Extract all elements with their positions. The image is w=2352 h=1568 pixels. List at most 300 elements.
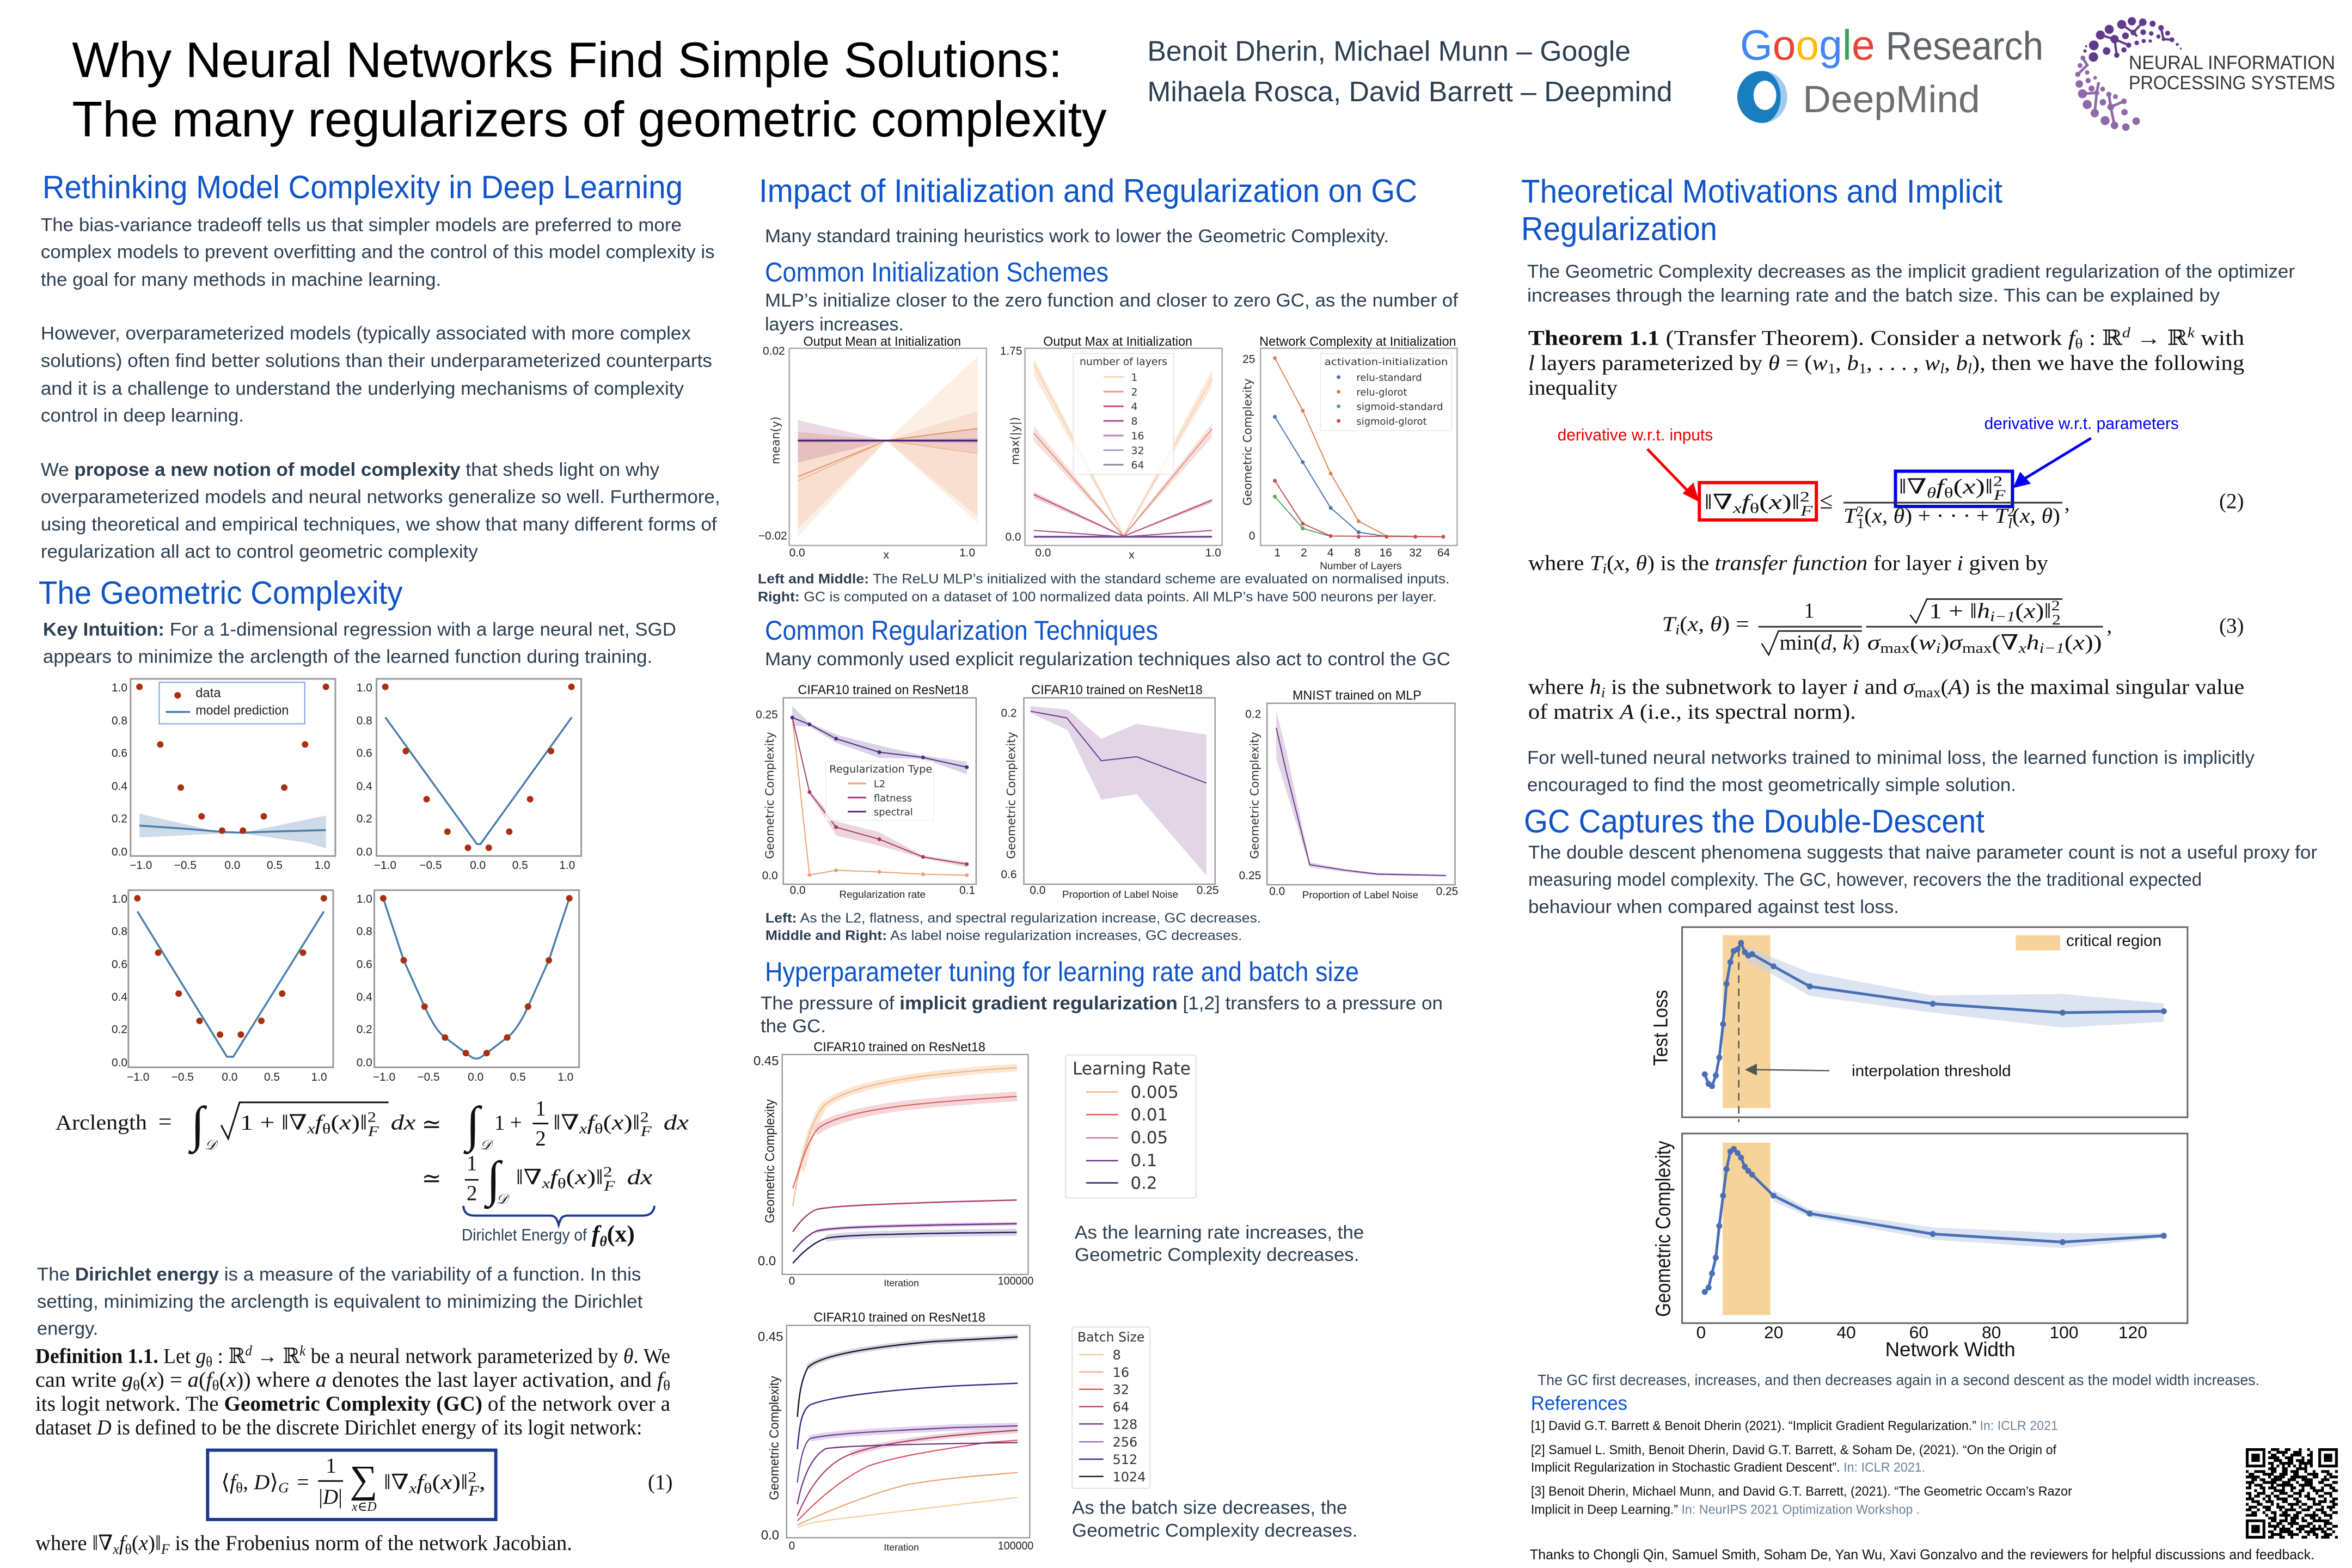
chart: batch size vs GC: 0.0: [761, 1528, 779, 1542]
chart: regression fit, early training: 0.2: [112, 813, 127, 825]
chart: batch size vs GC: 0: [789, 1540, 795, 1552]
text block: subnetwork definition: [1528, 675, 2244, 724]
chart: label noise CIFAR10: [1001, 683, 1219, 901]
text block: learning rate conclusion: [1075, 1222, 1364, 1265]
chart: regression fit, sharper V: 0.0: [112, 1056, 127, 1069]
heading: theoretical motivations: Theoretical Motivations and Implicit: [1521, 173, 2002, 210]
text block: theorem 1.1: ), then we have the following: [1972, 351, 2244, 375]
text block: new notion of model complexity: [41, 460, 720, 562]
equation: arclength: ∫: [188, 1096, 207, 1154]
chart: network complexity at initialization: 25: [1242, 353, 1255, 366]
text block: training heuristics: Many standard training heuristics work to lower the Geometric Complexity.: [765, 226, 1389, 247]
equation: transfer function: min(d, k): [1780, 631, 1860, 654]
chart: regression fit, sharper V: 0.0: [222, 1071, 237, 1083]
equation: arclength: x: [307, 1120, 315, 1136]
chart: regularization type vs GC: Regularization Type: [829, 763, 932, 775]
chart: regularization type vs GC: Geometric Complexity: [763, 732, 776, 859]
chart: regularization type vs GC: L2: [874, 779, 885, 790]
chart: regularization type vs GC: 0.0: [762, 869, 778, 882]
equation: transfer function: x: [2018, 640, 2026, 656]
chart: regression fit, early training: 1.0: [112, 682, 127, 694]
chart: regularization type vs GC: CIFAR10 trained on ResNet18: [798, 683, 969, 697]
chart: label noise CIFAR10: 0.25: [1197, 884, 1219, 897]
text block: definition 1.1: θ: [663, 1377, 670, 1393]
text block: frobenius norm: x: [112, 1541, 119, 1557]
text block: theorem 1.1: : ℝ: [2083, 327, 2123, 350]
text block: definition 1.1: θ: [212, 1377, 219, 1393]
chart: network complexity at initialization: Network Complexity at Initialization: [1259, 334, 1456, 349]
equation box: geometric complexity definition: θ: [424, 1480, 432, 1496]
chart: regression fit, sharper V: 1.0: [112, 893, 127, 905]
chart: label noise CIFAR10: CIFAR10 trained on ResNet18: [1031, 683, 1203, 697]
equation: transfer inequality: f: [1936, 475, 1948, 498]
equation: arclength: ≃: [421, 1112, 442, 1138]
text block: theorem 1.1: with: [2195, 327, 2244, 350]
equation: transfer inequality: x: [1732, 500, 1742, 516]
text block: MLP initialization: MLP’s initialize closer to the zero function and closer to zero GC, as the number of: [765, 290, 1458, 311]
chart: label noise MNIST: Geometric Complexity: [1248, 732, 1261, 859]
chart: output mean at initialization: 1.0: [959, 547, 975, 559]
chart: geometric complexity vs network width: Network Width: [1885, 1338, 2016, 1361]
text block: definition 1.1: : ℝ: [212, 1344, 246, 1368]
text block: definition 1.1: Definition 1.1. Let g: [35, 1344, 206, 1368]
text block: theorem 1.1: → ℝ: [2130, 327, 2188, 350]
legend: batch size: Batch Size: [1077, 1330, 1144, 1345]
chart: regression fit, early training: 0.6: [112, 747, 127, 759]
equation: transfer inequality: θ: [1750, 500, 1759, 516]
equation: transfer inequality: (: [1864, 504, 1872, 528]
legend: batch size: 8: [1113, 1347, 1121, 1363]
text block: dirichlet energy: The Dirichlet energy is a measure of the variability of a function. In this: [37, 1264, 641, 1285]
chart: regularization type vs GC: flatness: [874, 793, 912, 804]
chart: output mean at initialization: −0.02: [758, 530, 787, 542]
chart: regression fit, sharper V: 0.4: [112, 991, 127, 1003]
chart: regression fit, sharper V: −0.5: [171, 1071, 194, 1083]
text block: definition 1.1: k: [299, 1343, 306, 1358]
equation: transfer function: σ: [1949, 631, 1963, 654]
equation number 2: (2): [2219, 489, 2244, 513]
chart: regression fit, V shape: 0.5: [512, 859, 528, 872]
logo: DeepMind: [1737, 71, 1980, 123]
legend: learning rate: 0.2: [1131, 1174, 1157, 1193]
chart: regression fit, early training: −1.0: [130, 859, 152, 872]
text block: overparameterized models: [41, 323, 712, 426]
text block: theorem 1.1: , . . . ,: [1866, 351, 1925, 375]
chart: output max at initialization: max(|y|): [1009, 417, 1022, 465]
chart: output max at initialization: x: [1129, 549, 1135, 561]
equation: transfer inequality: 2: [1800, 489, 1810, 505]
heading: the geometric complexity: The Geometric Complexity: [39, 574, 403, 611]
chart: regression fit, early training: 0.4: [112, 780, 127, 793]
chart: regularization type vs GC: 0.25: [756, 709, 778, 721]
equation: arclength: x)‖: [340, 1111, 364, 1135]
text block: theorem 1.1: 1: [1859, 360, 1866, 376]
logo: DeepMind: DeepMind: [1803, 78, 1980, 120]
text block: definition 1.1: → ℝ: [252, 1344, 300, 1368]
text block: bias-variance tradeoff: complex models to prevent overfitting and the control of this model complexity is: [41, 242, 715, 262]
logo: Google Research: [1740, 22, 2043, 69]
chart: learning rate vs GC: 0.45: [754, 1054, 779, 1069]
text block: MLP initialization: [765, 290, 1458, 335]
text block: new notion of model complexity: regularization all act to control geometric complexity: [41, 541, 479, 562]
references: [1531, 1393, 2072, 1517]
text block: double descent: [1528, 842, 2317, 917]
annotation: derivative w.r.t. parameters: [1984, 414, 2179, 488]
chart: learning rate vs GC: 100000: [998, 1275, 1033, 1288]
caption: double descent: The GC first decreases, increases, and then decreases again in a second descent as the model width increases.: [1538, 1371, 2259, 1388]
equation: arclength: θ: [595, 1120, 603, 1136]
equation box: geometric complexity definition: |D|: [318, 1485, 342, 1509]
chart: geometric complexity vs network width: 80: [1982, 1322, 2001, 1342]
text block: MLP initialization: layers increases.: [765, 314, 904, 335]
text block: subnetwork definition: is the subnetwork to layer: [1606, 675, 1853, 699]
text block: theorem 1.1: k: [2188, 325, 2195, 341]
equation: arclength: ∫: [463, 1096, 482, 1154]
chart: batch size vs GC: 0.45: [758, 1330, 783, 1344]
equation box: geometric complexity definition: [207, 1450, 496, 1520]
text block: subnetwork definition: where h: [1528, 675, 1600, 699]
equation: arclength: 2: [603, 1164, 612, 1180]
chart: regression fit, sharper V: 0.5: [264, 1071, 280, 1083]
equation: transfer inequality: x)‖: [1963, 475, 1988, 498]
equation: transfer function: 2: [2052, 612, 2061, 628]
equation: transfer inequality: ‖∇: [1898, 475, 1919, 498]
equation: arclength: (: [566, 1166, 575, 1189]
references: References: [1531, 1393, 1627, 1414]
chart: regression fit, converged: 0.8: [357, 926, 372, 938]
equation box: geometric complexity definition: f: [416, 1471, 427, 1494]
panel: double descent: [1524, 803, 2338, 1563]
text block: overparameterized models: However, overparameterized models (typically associated with more complex: [41, 323, 691, 344]
text block: learning rate conclusion: Geometric Complexity decreases.: [1075, 1245, 1359, 1265]
equation: transfer function: x)‖: [2024, 599, 2048, 623]
annotation: derivative w.r.t. parameters: derivative w.r.t. parameters: [1984, 414, 2179, 433]
chart: label noise MNIST: [1239, 688, 1458, 901]
text block: definition 1.1: θ: [206, 1353, 212, 1369]
chart: output mean at initialization: x: [884, 549, 890, 561]
text block: theorem 1.1: inequality: [1528, 376, 1618, 400]
chart: geometric complexity vs network width: 60: [1909, 1322, 1928, 1342]
chart: regression fit, V shape: 0.2: [357, 813, 372, 825]
equation box: geometric complexity definition: =: [297, 1471, 309, 1494]
chart: regression fit, converged: [357, 890, 579, 1083]
chart: regression fit, V shape: 1.0: [559, 859, 575, 872]
equation: transfer inequality: F: [1800, 503, 1814, 519]
equation: transfer inequality: θ: [1927, 485, 1937, 500]
equation: transfer function: i: [1675, 622, 1680, 638]
text block: frobenius norm: f: [119, 1532, 128, 1555]
equation box: geometric complexity definition: θ: [236, 1480, 243, 1496]
chart: regression fit, early training: 0.0: [112, 846, 127, 858]
chart: learning rate vs GC: [754, 1040, 1033, 1289]
chart: learning rate vs GC: 0.0: [758, 1254, 776, 1269]
annotation: derivative w.r.t. inputs: [1558, 425, 1713, 502]
text block: subnetwork definition: (: [1941, 675, 1949, 699]
equation: transfer function: (∇: [1992, 631, 2019, 654]
text block: theorem 1.1: l: [1968, 360, 1972, 376]
legend: critical region: critical region: [2066, 932, 2161, 950]
chart: test loss vs network width: [1650, 927, 2188, 1122]
equation: transfer function: 1 + ‖ h: [1929, 599, 1988, 623]
equation: transfer inequality: f: [1742, 491, 1754, 514]
chart: output mean at initialization: mean(y): [769, 416, 782, 464]
legend: learning rate: 0.01: [1131, 1105, 1168, 1125]
equation: arclength: ≃: [421, 1166, 442, 1192]
equation: transfer inequality: 2: [2007, 504, 2015, 519]
chart: label noise CIFAR10: Proportion of Label Noise: [1062, 889, 1178, 901]
equation: transfer inequality: (: [2012, 504, 2020, 528]
chart: network complexity at initialization: 32: [1409, 547, 1422, 559]
legend: learning rate: [1065, 1055, 1196, 1198]
equation: arclength: (: [330, 1111, 340, 1135]
equation: arclength: x: [579, 1120, 587, 1136]
chart: network complexity at initialization: 64: [1437, 547, 1450, 559]
equation: arclength: [56, 1096, 689, 1209]
chart: network complexity at initialization: sigmoid-glorot: [1356, 416, 1427, 427]
text block: frobenius norm: F: [161, 1541, 170, 1557]
QR code: [2246, 1448, 2338, 1539]
chart: output max at initialization: number of layers: [1080, 356, 1167, 368]
caption: regularization charts: Left: As the L2, flatness, and spectral regularization increase, GC decreases.: [765, 911, 1261, 926]
text block: definition 1.1: x)) where a denotes the last layer activation, and f: [226, 1368, 663, 1392]
chart: learning rate vs GC: Iteration: [884, 1278, 919, 1289]
chart: regularization type vs GC: spectral: [874, 807, 913, 818]
equation: transfer function: (: [2015, 599, 2024, 623]
text block: implicit gradient regularization: The pressure of implicit gradient regularization [1,2] transfers to a pressure on: [761, 993, 1443, 1014]
text block: transfer function: where T: [1528, 552, 1602, 575]
chart: output max at initialization: 0.0: [1035, 547, 1051, 559]
equation: transfer inequality: (: [1953, 475, 1963, 498]
chart: label noise MNIST: 0.0: [1269, 885, 1285, 898]
equation number 1: (1): [648, 1471, 672, 1494]
chart: geometric complexity vs network width: 40: [1836, 1322, 1856, 1342]
equation: arclength: dx: [384, 1111, 415, 1135]
heading: GC captures the double-descent: GC Captures the Double-Descent: [1524, 803, 1984, 840]
chart: output mean at initialization: 0.0: [789, 547, 805, 559]
equation box: geometric complexity definition: G: [278, 1480, 289, 1496]
chart: regression fit, converged: 0.0: [357, 1056, 372, 1069]
chart: output max at initialization: 0.0: [1005, 531, 1021, 543]
text block: theorem 1.1: [1528, 325, 2244, 400]
chart: regression fit, early training: −0.5: [174, 859, 197, 872]
annotation: dirichlet energy brace: Dirichlet Energy of: [462, 1226, 587, 1245]
equation: transfer inequality: l: [2008, 516, 2012, 531]
equation: transfer function: i−1: [2039, 640, 2065, 656]
chart: network complexity at initialization: relu-glorot: [1356, 387, 1407, 398]
text block: subnetwork definition: A) is the maximal singular value: [1949, 675, 2224, 699]
equation: arclength: Arclength: [56, 1111, 147, 1135]
references: [3] Benoit Dherin, Michael Munn, and David G.T. Barrett, (2021). “The Geometric Occam’s Razor: [1531, 1484, 2072, 1499]
equation: transfer function: T: [1662, 612, 1677, 636]
chart: output max at initialization: 2: [1131, 386, 1138, 398]
equation box: geometric complexity definition: ,: [479, 1471, 486, 1494]
text block: GC and optimizer: increases through the learning rate and the batch size. This can be explained by: [1527, 285, 2220, 306]
legend: batch size: 512: [1113, 1452, 1137, 1467]
text block: new notion of model complexity: using theoretical and empirical techniques, we show that many different forms of: [41, 514, 717, 535]
chart: regression fit, sharper V: 0.8: [112, 926, 127, 938]
chart: label noise CIFAR10: Geometric Complexity: [1005, 732, 1018, 859]
heading: impact of initialization and regularization: Impact of Initialization and Regularization on GC: [759, 173, 1417, 209]
chart: regression fit, V shape: 0.4: [357, 780, 372, 793]
text block: definition 1.1: d: [245, 1343, 252, 1358]
chart: regularization type vs GC: 0.0: [790, 884, 806, 897]
title: [72, 32, 1107, 148]
equation: transfer inequality: (: [1759, 491, 1769, 514]
chart: output max at initialization: 64: [1131, 460, 1144, 471]
text block: key intuition: appears to minimize the arclength of the learned function during training.: [43, 646, 652, 667]
chart: regression fit, sharper V: 0.2: [112, 1024, 127, 1036]
chart: output max at initialization: 1.0: [1205, 547, 1221, 559]
references: Implicit Regularization in Stochastic Gradient Descent”. In: ICLR 2021.: [1531, 1460, 1925, 1475]
heading: rethinking model complexity: Rethinking Model Complexity in Deep Learning: [42, 169, 683, 205]
chart: network complexity at initialization: 16: [1380, 547, 1392, 559]
legend: batch size: 64: [1113, 1400, 1129, 1415]
authors: Benoit Dherin, Michael Munn – Google: [1147, 35, 1631, 66]
equation: transfer function: σ: [1867, 631, 1882, 654]
text block: subnetwork definition: of matrix A (i.e., its spectral norm).: [1528, 700, 1856, 724]
chart: regression fit, converged: −1.0: [373, 1071, 395, 1083]
acknowledgements: Thanks to Chongli Qin, Samuel Smith, Soham De, Yan Wu, Xavi Gonzalvo and the reviewers for helpful discussions and feedback.: [1530, 1546, 2314, 1563]
equation: transfer function: i−1: [1990, 609, 2015, 624]
text block: well-tuned networks: encouraged to find the most geometrically simple solution.: [1527, 775, 2016, 795]
chart: batch size vs GC: Iteration: [884, 1542, 919, 1553]
equation: transfer inequality: [1699, 471, 2070, 531]
equation: arclength: x: [541, 1175, 550, 1191]
chart: geometric complexity vs network width: 0: [1696, 1322, 1706, 1342]
chart: network complexity at initialization: activation-initialization: [1325, 357, 1448, 368]
equation: transfer inequality: 2: [1993, 473, 2002, 489]
heading: theoretical motivations: [1521, 173, 2002, 247]
text block: key intuition: Key Intuition: For a 1-dimensional regression with a large neural net, SGD: [43, 620, 676, 640]
text block: theorem 1.1: l layers parameterized by θ = (w: [1528, 351, 1826, 375]
panel: impact of initialization and regularization: [754, 173, 1458, 1553]
equation: arclength: F: [603, 1178, 616, 1194]
chart: learning rate vs GC: CIFAR10 trained on ResNet18: [813, 1040, 985, 1055]
equation: arclength: 𝒟: [480, 1137, 494, 1153]
authors: [1147, 35, 1673, 107]
text block: theorem 1.1: b: [1956, 351, 1968, 375]
chart: regression fit, sharper V: 0.6: [112, 958, 127, 971]
text block: new notion of model complexity: overparameterized models and neural networks generalize so well. Furthermore,: [41, 487, 720, 507]
chart: batch size vs GC: [758, 1310, 1033, 1553]
equation: transfer inequality: x)‖: [1769, 491, 1795, 514]
chart: regression fit, early training: model prediction: [195, 703, 289, 718]
chart: regression fit, early training: [112, 679, 335, 872]
panel: the geometric complexity: [35, 574, 689, 1557]
chart: regression fit, converged: 1.0: [558, 1071, 573, 1083]
chart: regression fit, early training: 0.5: [267, 859, 283, 872]
equation: transfer function: 1: [1804, 599, 1815, 622]
equation: arclength: 2: [535, 1126, 546, 1150]
equation: transfer function: x, θ) =: [1688, 612, 1746, 636]
chart: batch size vs GC: CIFAR10 trained on ResNet18: [813, 1310, 985, 1325]
chart: batch size vs GC: 100000: [998, 1540, 1033, 1552]
equation: transfer function: (: [1680, 612, 1688, 636]
equation box: geometric complexity definition: x)‖: [440, 1471, 465, 1494]
equation: arclength: ‖∇: [516, 1166, 536, 1189]
logo: NeurIPS: PROCESSING SYSTEMS: [2129, 72, 2335, 94]
caption: regularization charts: [765, 911, 1261, 944]
text block: key intuition: [43, 620, 676, 667]
equation: arclength: 1 +: [494, 1111, 522, 1135]
annotation: dirichlet energy brace: (x): [607, 1221, 635, 1247]
text block: implicit gradient regularization: the GC.: [761, 1016, 826, 1037]
text block: new notion of model complexity: We propose a new notion of model complexity that sheds light on why: [41, 460, 660, 480]
text block: subnetwork definition: i and σ: [1853, 675, 1914, 699]
chart: label noise MNIST: 0.25: [1239, 869, 1261, 882]
equation box: geometric complexity definition: ∑: [350, 1458, 377, 1501]
text block: definition 1.1: θ. We: [623, 1344, 671, 1368]
legend: batch size: 128: [1113, 1417, 1137, 1432]
heading: theoretical motivations: Regularization: [1521, 211, 1717, 247]
equation: transfer function: max: [1880, 640, 1910, 656]
text block: transfer function: i: [1602, 561, 1607, 577]
equation: transfer inequality: ,: [2065, 492, 2070, 515]
logo: Google Research: Google: [1740, 22, 1875, 69]
text block: definition 1.1: can write g: [35, 1368, 132, 1392]
equation box: geometric complexity definition: 1: [326, 1454, 336, 1477]
references: [1] David G.T. Barrett & Benoit Dherin (2021). “Implicit Gradient Regularization.” In: ICLR 2021: [1531, 1418, 2058, 1433]
chart: regression fit, sharper V: −1.0: [127, 1071, 149, 1083]
equation: arclength: dx: [657, 1111, 689, 1135]
equation: transfer inequality: ‖∇: [1704, 491, 1725, 514]
text block: theorem 1.1: b: [1847, 351, 1859, 375]
equation: arclength: f: [550, 1166, 561, 1189]
text block: double descent: behaviour when compared against test loss.: [1528, 897, 1899, 917]
legend: batch size: 256: [1113, 1435, 1137, 1450]
equation: transfer inequality: F: [1993, 487, 2006, 503]
chart: regression fit, V shape: 0.0: [357, 846, 372, 858]
chart: regression fit, V shape: 1.0: [357, 682, 372, 694]
subheading: hyperparameter tuning: Hyperparameter tuning for learning rate and batch size: [765, 957, 1359, 987]
annotation: derivative w.r.t. inputs: derivative w.r.t. inputs: [1558, 425, 1713, 444]
equation: transfer function: i: [1936, 640, 1940, 656]
chart: network complexity at initialization: relu-standard: [1356, 372, 1422, 383]
authors: Mihaela Rosca, David Barrett – Deepmind: [1147, 76, 1673, 107]
chart: output max at initialization: Output Max at Initialization: [1043, 334, 1192, 349]
legend: critical region: [2016, 932, 2161, 951]
chart: geometric complexity vs network width: 20: [1764, 1322, 1783, 1342]
text block: definition 1.1: [35, 1343, 670, 1440]
chart: network complexity at initialization: 0: [1249, 530, 1255, 542]
text block: well-tuned networks: [1527, 748, 2255, 795]
chart: label noise MNIST: MNIST trained on MLP: [1293, 688, 1422, 703]
chart: output max at initialization: 32: [1131, 445, 1144, 457]
legend: batch size: 1024: [1113, 1469, 1146, 1485]
chart: regression fit, converged: 0.2: [357, 1024, 372, 1036]
text block: theorem 1.1: ,: [1835, 351, 1847, 375]
text block: theorem 1.1: w: [1925, 351, 1940, 375]
title: The many regularizers of geometric complexity: [72, 92, 1107, 148]
text block: theorem 1.1: Theorem 1.1 (Transfer Theorem). Consider a network f: [1528, 327, 2074, 350]
caption: initialization charts: Right: GC is computed on a dataset of 100 normalized data points. All MLP’s have 500 neurons per layer.: [758, 589, 1437, 604]
chart: label noise CIFAR10: 0.6: [1001, 868, 1017, 881]
chart: output max at initialization: 4: [1131, 401, 1138, 413]
equation: transfer function: x)): [2073, 631, 2099, 654]
equation: arclength: ∫: [484, 1151, 503, 1209]
subheading: common regularization techniques: Common Regularization Techniques: [765, 615, 1158, 646]
text block: explicit regularization: Many commonly used explicit regularization techniques also act to control the GC: [765, 649, 1450, 670]
caption: initialization charts: Left and Middle: The ReLU MLP’s initialized with the standard scheme are evaluated on normalised inputs.: [758, 572, 1450, 587]
equation: arclength: x)‖: [612, 1111, 636, 1135]
equation box: geometric complexity definition: ‖∇: [384, 1471, 405, 1494]
text block: definition 1.1: (: [219, 1368, 226, 1392]
equation: arclength: f: [587, 1111, 598, 1135]
equation: transfer inequality: ≤: [1820, 488, 1833, 514]
equation: arclength: F: [367, 1123, 379, 1139]
chart: regression fit, early training: 1.0: [315, 859, 330, 872]
chart: network complexity at initialization: sigmoid-standard: [1356, 401, 1443, 413]
